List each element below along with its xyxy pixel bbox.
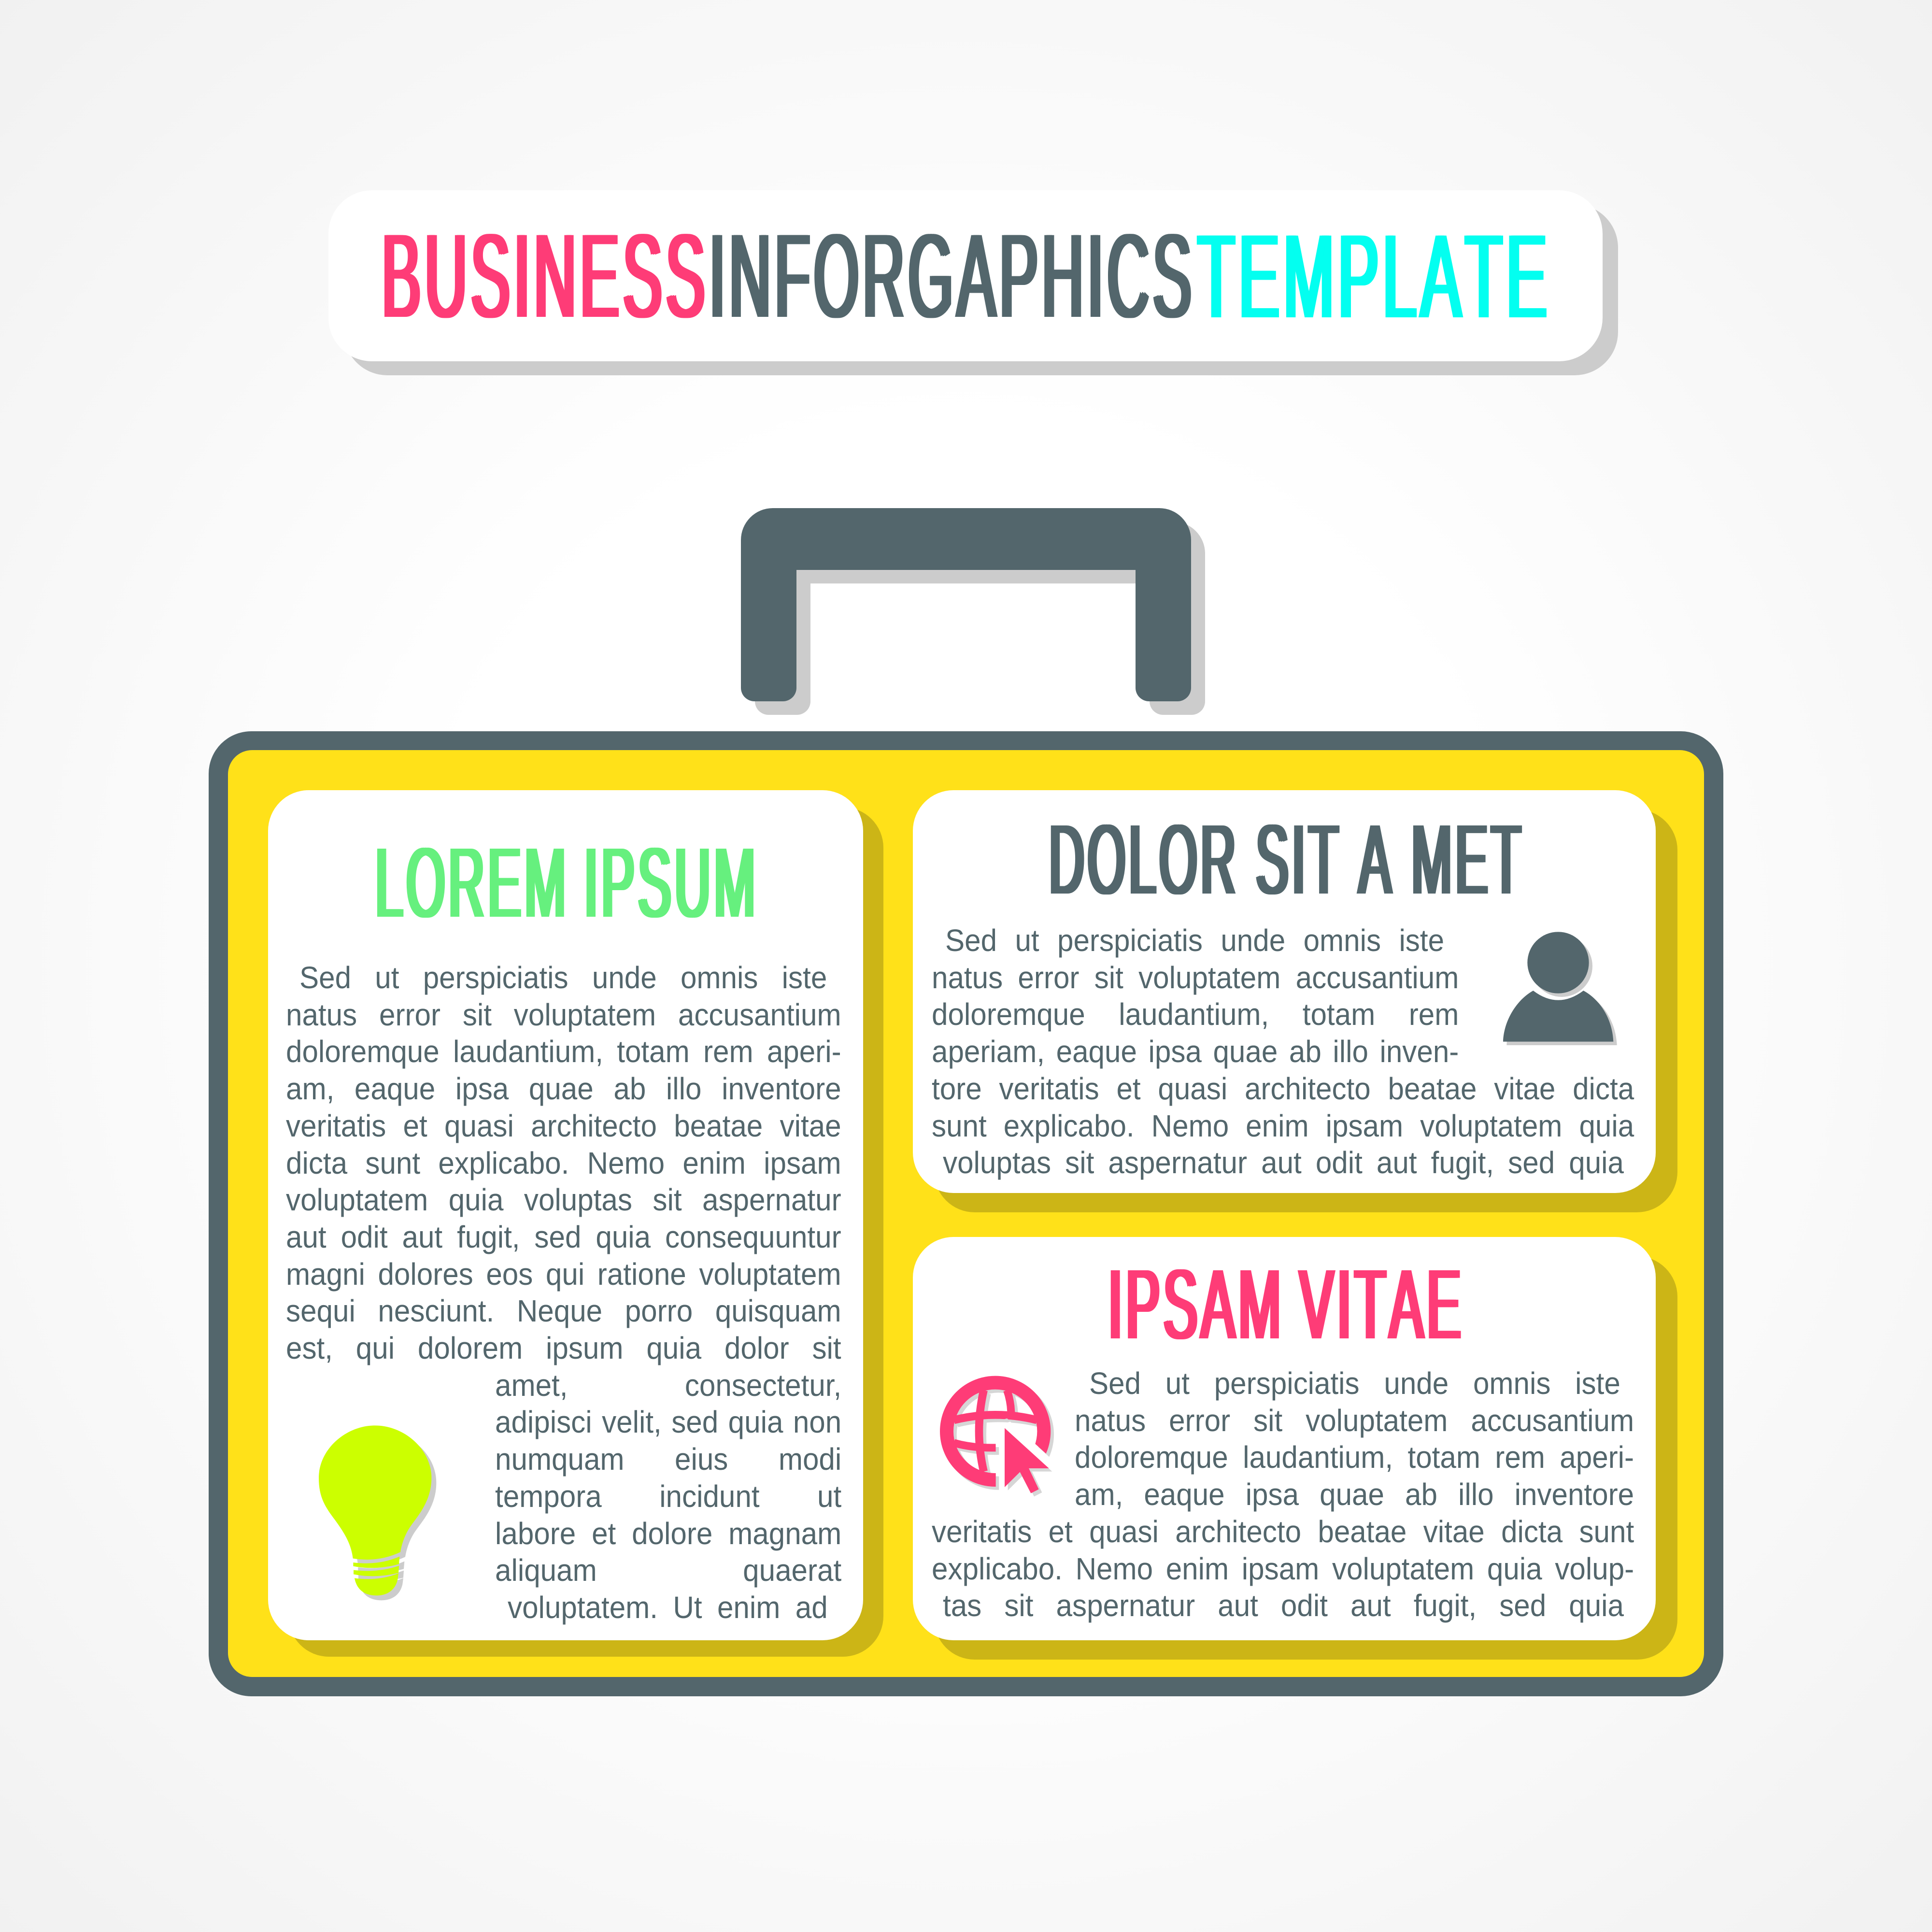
text block: lorem ipsum body: amet, consectetur, bbox=[495, 1368, 841, 1403]
text block: ipsam vitae body: veritatis et quasi architecto beatae vitae dicta sunt bbox=[932, 1514, 1634, 1549]
text block: lorem ipsum body: est, qui dolorem ipsum quia dolor sit bbox=[286, 1331, 841, 1365]
text block: ipsam vitae body: natus error sit voluptatem accusantium bbox=[1075, 1403, 1634, 1438]
text block: ipsam vitae body: tas sit aspernatur aut odit aut fugit, sed quia bbox=[943, 1588, 1624, 1623]
heading: lorem ipsum: LOREM IPSUM bbox=[376, 828, 759, 938]
title text: BUSINESS bbox=[382, 210, 709, 342]
icon: light bulb bbox=[319, 1425, 437, 1601]
text block: dolor sit a met body: natus error sit voluptatem accusantium bbox=[932, 960, 1459, 995]
text block: lorem ipsum body: voluptatem quia voluptas sit aspernatur bbox=[286, 1182, 841, 1217]
text block: ipsam vitae body bbox=[932, 1366, 1634, 1623]
title text: TEMPLATE bbox=[1198, 211, 1551, 343]
briefcase body bbox=[209, 731, 1723, 1696]
panel: lorem ipsum bbox=[268, 790, 883, 1657]
text block: lorem ipsum body: veritatis et quasi architecto beatae vitae bbox=[286, 1108, 841, 1143]
briefcase handle bbox=[741, 508, 1205, 715]
text block: lorem ipsum body: sequi nesciunt. Neque porro quisquam bbox=[286, 1293, 841, 1328]
text block: dolor sit a met body: tore veritatis et quasi architecto beatae vitae dicta bbox=[932, 1071, 1634, 1106]
text block: ipsam vitae body: Sed ut perspiciatis unde omnis iste bbox=[1089, 1366, 1620, 1401]
text block: lorem ipsum body: aliquam quaerat bbox=[495, 1553, 841, 1588]
heading: dolor sit a met: DOLOR SIT A MET bbox=[1049, 805, 1524, 915]
text block: lorem ipsum body: numquam eius modi bbox=[495, 1442, 841, 1477]
text block: lorem ipsum body: magni dolores eos qui ratione voluptatem bbox=[286, 1257, 841, 1292]
text block: dolor sit a met body: sunt explicabo. Nemo enim ipsam voluptatem quia bbox=[932, 1108, 1634, 1143]
text block: dolor sit a met body: doloremque laudantium, totam rem bbox=[932, 997, 1459, 1032]
text block: lorem ipsum body: labore et dolore magnam bbox=[495, 1516, 841, 1550]
text block: dolor sit a met body: Sed ut perspiciatis unde omnis iste bbox=[945, 923, 1444, 958]
title text bbox=[382, 210, 1551, 343]
panel: ipsam vitae bbox=[913, 1237, 1677, 1660]
text block: lorem ipsum body: aut odit aut fugit, sed quia consequuntur bbox=[286, 1220, 841, 1254]
text block: lorem ipsum body bbox=[286, 960, 841, 1625]
text block: ipsam vitae body: doloremque laudantium, totam rem aperi- bbox=[1075, 1440, 1634, 1475]
text block: lorem ipsum body: dicta sunt explicabo. Nemo enim ipsam bbox=[286, 1146, 841, 1180]
text block: lorem ipsum body: voluptatem. Ut enim ad bbox=[508, 1590, 828, 1625]
text block: lorem ipsum body: doloremque laudantium, totam rem aperi- bbox=[286, 1034, 841, 1069]
text block: dolor sit a met body: aperiam, eaque ipsa quae ab illo inven- bbox=[932, 1034, 1459, 1069]
text block: ipsam vitae body: am, eaque ipsa quae ab illo inventore bbox=[1075, 1477, 1634, 1512]
text block: lorem ipsum body: Sed ut perspiciatis unde omnis iste bbox=[299, 960, 827, 995]
text block: ipsam vitae body: explicabo. Nemo enim ipsam voluptatem quia volup- bbox=[932, 1551, 1634, 1586]
icon: person bbox=[1503, 932, 1617, 1045]
text block: lorem ipsum body: adipisci velit, sed quia non bbox=[495, 1405, 841, 1439]
text block: lorem ipsum body: natus error sit voluptatem accusantium bbox=[286, 997, 841, 1032]
heading: ipsam vitae: IPSAM VITAE bbox=[1108, 1249, 1464, 1360]
title text: INFORGAPHICS bbox=[710, 210, 1195, 342]
text block: lorem ipsum body: am, eaque ipsa quae ab illo inventore bbox=[286, 1071, 841, 1106]
icon: globe with cursor bbox=[940, 1376, 1054, 1496]
panel: dolor sit a met bbox=[913, 790, 1677, 1212]
text block: dolor sit a met body: voluptas sit aspernatur aut odit aut fugit, sed quia bbox=[943, 1145, 1624, 1180]
text block: lorem ipsum body: tempora incidunt ut bbox=[495, 1479, 841, 1514]
title banner bbox=[352, 210, 1618, 375]
text block: dolor sit a met body bbox=[932, 923, 1634, 1180]
